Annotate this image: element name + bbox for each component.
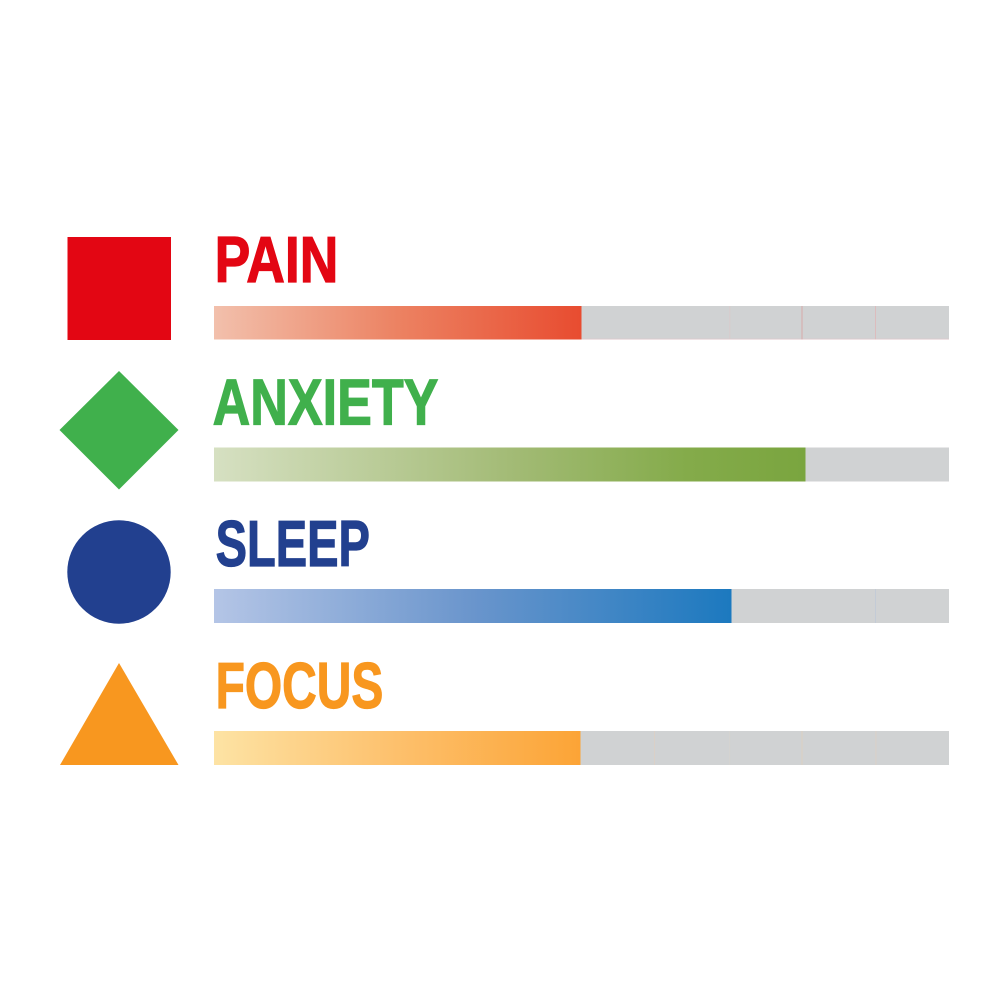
heading: FOCUS: FOCUS	[216, 650, 383, 722]
heading: PAIN: PAIN	[215, 224, 338, 296]
icon: green diamond	[60, 371, 178, 490]
bar: pain level	[214, 306, 949, 340]
heading: ANXIETY: ANXIETY	[213, 366, 438, 438]
icon: red square	[68, 237, 171, 340]
bar: anxiety level	[214, 448, 949, 482]
bar: focus level	[214, 731, 949, 765]
icon: orange triangle	[60, 663, 178, 765]
icon: blue circle	[67, 520, 171, 624]
heading: SLEEP: SLEEP	[216, 508, 370, 580]
bar: sleep level	[214, 589, 949, 623]
